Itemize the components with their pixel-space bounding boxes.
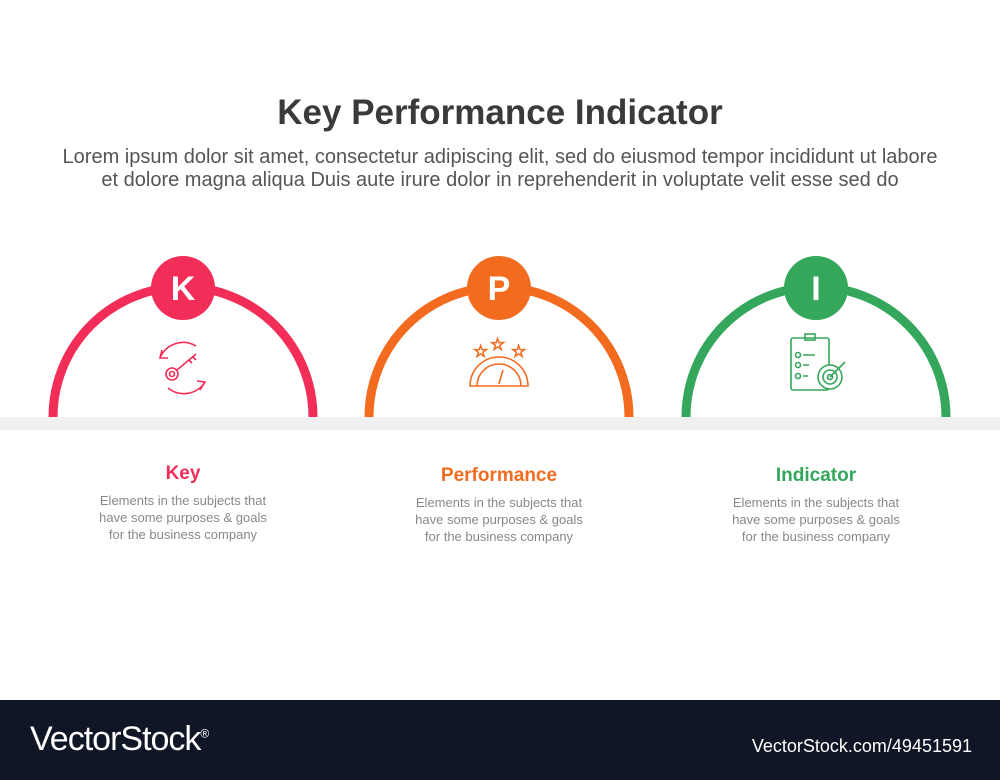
text block: Indicator: Elements in the subjects that bbox=[733, 495, 899, 510]
panel: P arc: P bbox=[488, 270, 510, 308]
panel: P arc bbox=[369, 256, 629, 417]
text block: Key: Key bbox=[166, 463, 200, 484]
text block: Key bbox=[99, 463, 267, 542]
text block: Performance: Elements in the subjects that bbox=[416, 495, 582, 510]
text block: Performance: Performance bbox=[441, 465, 557, 486]
panel: I arc: I bbox=[811, 270, 821, 308]
text block: Key: for the business company bbox=[109, 527, 257, 542]
text block: Key: Elements in the subjects that bbox=[100, 493, 266, 508]
icon: gauge with stars: ☆ bbox=[473, 342, 488, 361]
text block: Indicator: have some purposes & goals bbox=[732, 512, 900, 527]
text block: Indicator: Indicator bbox=[776, 465, 856, 486]
footer bar bbox=[0, 700, 1000, 780]
icon: clipboard target bbox=[791, 334, 845, 390]
gray baseline band bbox=[0, 417, 1000, 430]
diagram bbox=[48, 256, 950, 417]
text block: Performance: have some purposes & goals bbox=[415, 512, 583, 527]
icon: gauge with stars bbox=[470, 335, 528, 386]
subtitle text: et dolore magna aliqua Duis aute irure dolor in reprehenderit in voluptate velit esse sed do bbox=[101, 169, 899, 191]
text block: Indicator: for the business company bbox=[742, 529, 890, 544]
panel: K arc bbox=[53, 256, 313, 417]
icon: gauge with stars: ☆ bbox=[490, 335, 505, 354]
subtitle text: Lorem ipsum dolor sit amet, consectetur adipiscing elit, sed do eiusmod tempor incididunt ut labore bbox=[63, 146, 937, 168]
icon: gauge with stars: ☆ bbox=[511, 342, 526, 361]
text block: Indicator bbox=[732, 465, 900, 544]
text block: Performance bbox=[415, 465, 583, 544]
text block: Performance: for the business company bbox=[425, 529, 573, 544]
title: Key Performance Indicator bbox=[277, 93, 723, 132]
icon: key bbox=[160, 342, 205, 394]
panel: I arc bbox=[686, 256, 946, 417]
panel: K arc: K bbox=[171, 270, 196, 308]
footer bar: VectorStock® bbox=[30, 720, 208, 758]
subtitle text bbox=[63, 146, 937, 191]
footer bar: VectorStock.com/49451591 bbox=[752, 736, 972, 756]
text block: Key: have some purposes & goals bbox=[99, 510, 267, 525]
